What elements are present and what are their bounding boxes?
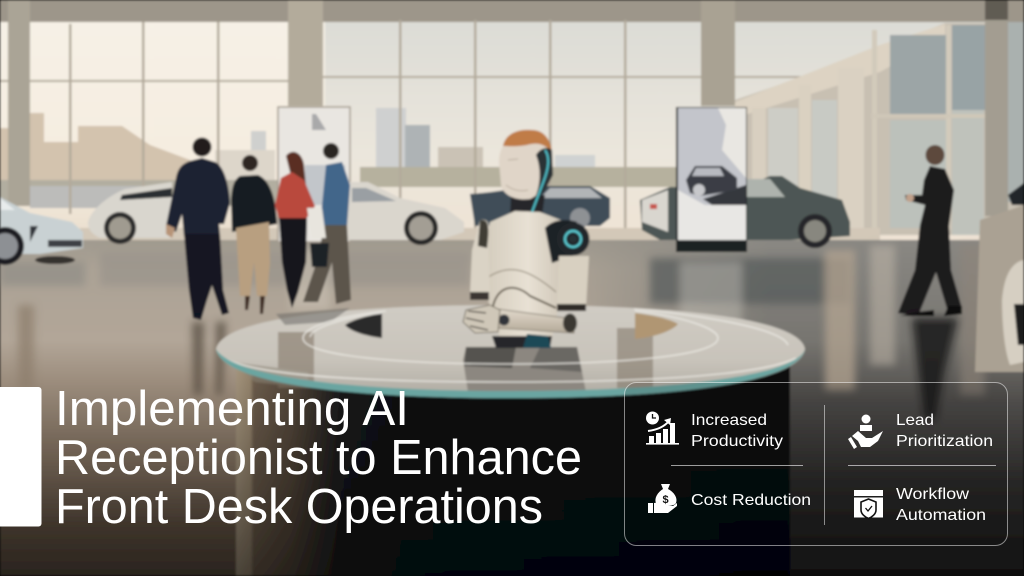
person: man in dark suit [166, 138, 230, 320]
label: Increased Productivity [691, 412, 783, 450]
floor [0, 240, 1024, 576]
label: Workflow Automation [896, 486, 986, 524]
person: woman in red top [275, 152, 315, 308]
city skyline [0, 108, 680, 208]
label: Lead Prioritization [896, 412, 993, 450]
neighbouring building [735, 0, 1024, 235]
label: Workflow Automation: Workflow [896, 486, 969, 503]
right upper arm [557, 256, 589, 308]
desk cut-out left [345, 313, 382, 338]
person: woman in black jacket and beige trousers [231, 155, 277, 314]
man standing at right [898, 145, 962, 316]
white sports car right of group [345, 182, 464, 245]
white accent block [0, 387, 42, 526]
label: Cost Reduction: Cost Reduction [691, 492, 811, 509]
hair [503, 130, 552, 152]
robot receptionist [463, 130, 590, 348]
icon: browser window with shield [854, 490, 883, 518]
head [499, 134, 551, 199]
person: man in blue shirt [303, 143, 351, 304]
desk cut-out right [635, 313, 678, 339]
horizontal divider right [848, 465, 996, 466]
glass reflections [232, 308, 653, 388]
label: Lead Prioritization: Lead [896, 412, 934, 429]
left arm [470, 220, 490, 296]
forearm and hand [497, 309, 574, 333]
reflected robot in glass [463, 347, 586, 392]
group of four people seen from behind [166, 138, 351, 320]
horizontal divider left [671, 465, 803, 466]
label: Workflow Automation: Automation [896, 507, 986, 524]
icon: clock and rising bars [646, 412, 679, 445]
waist [492, 336, 552, 348]
glazing mullions [0, 20, 985, 242]
icon: money bag on hand [648, 484, 677, 513]
torso [484, 211, 572, 338]
digital display with car [676, 107, 747, 252]
structural pillars [8, 0, 735, 206]
ring lines on the glass [224, 309, 796, 382]
dark green SUV [640, 176, 850, 248]
billboard behind group [278, 107, 350, 242]
icon: person on open hand [848, 414, 883, 449]
dark cylindrical desk base [236, 360, 790, 576]
icon: money bag on hand: $ [662, 494, 669, 506]
right shoulder with glowing ring [545, 220, 590, 263]
floor reflections [0, 245, 985, 395]
title: Receptionist to Enhance [55, 430, 582, 485]
title: Implementing AI [55, 381, 409, 436]
dark blue car behind robot [470, 186, 610, 228]
front desk equipment at right edge [975, 183, 1024, 372]
white car behind group [88, 182, 172, 244]
label: Increased Productivity: Productivity [691, 433, 783, 450]
ceiling beam [0, 0, 1024, 22]
label: Increased Productivity: Increased [691, 412, 767, 429]
vertical divider [824, 405, 825, 525]
neck [510, 195, 545, 216]
label: Lead Prioritization: Prioritization [896, 433, 993, 450]
panel: benefits [624, 382, 1008, 546]
cybernetic temple with teal line [535, 148, 553, 198]
reflections of people [192, 318, 958, 420]
far-left white car [0, 197, 83, 265]
windows and sky [0, 20, 1024, 245]
teal rim [216, 349, 805, 398]
light strip behind cars [80, 228, 880, 240]
title: Front Desk Operations [55, 479, 543, 534]
circular glass reception desk [216, 305, 805, 398]
panel background [624, 382, 1008, 546]
title [55, 381, 582, 534]
